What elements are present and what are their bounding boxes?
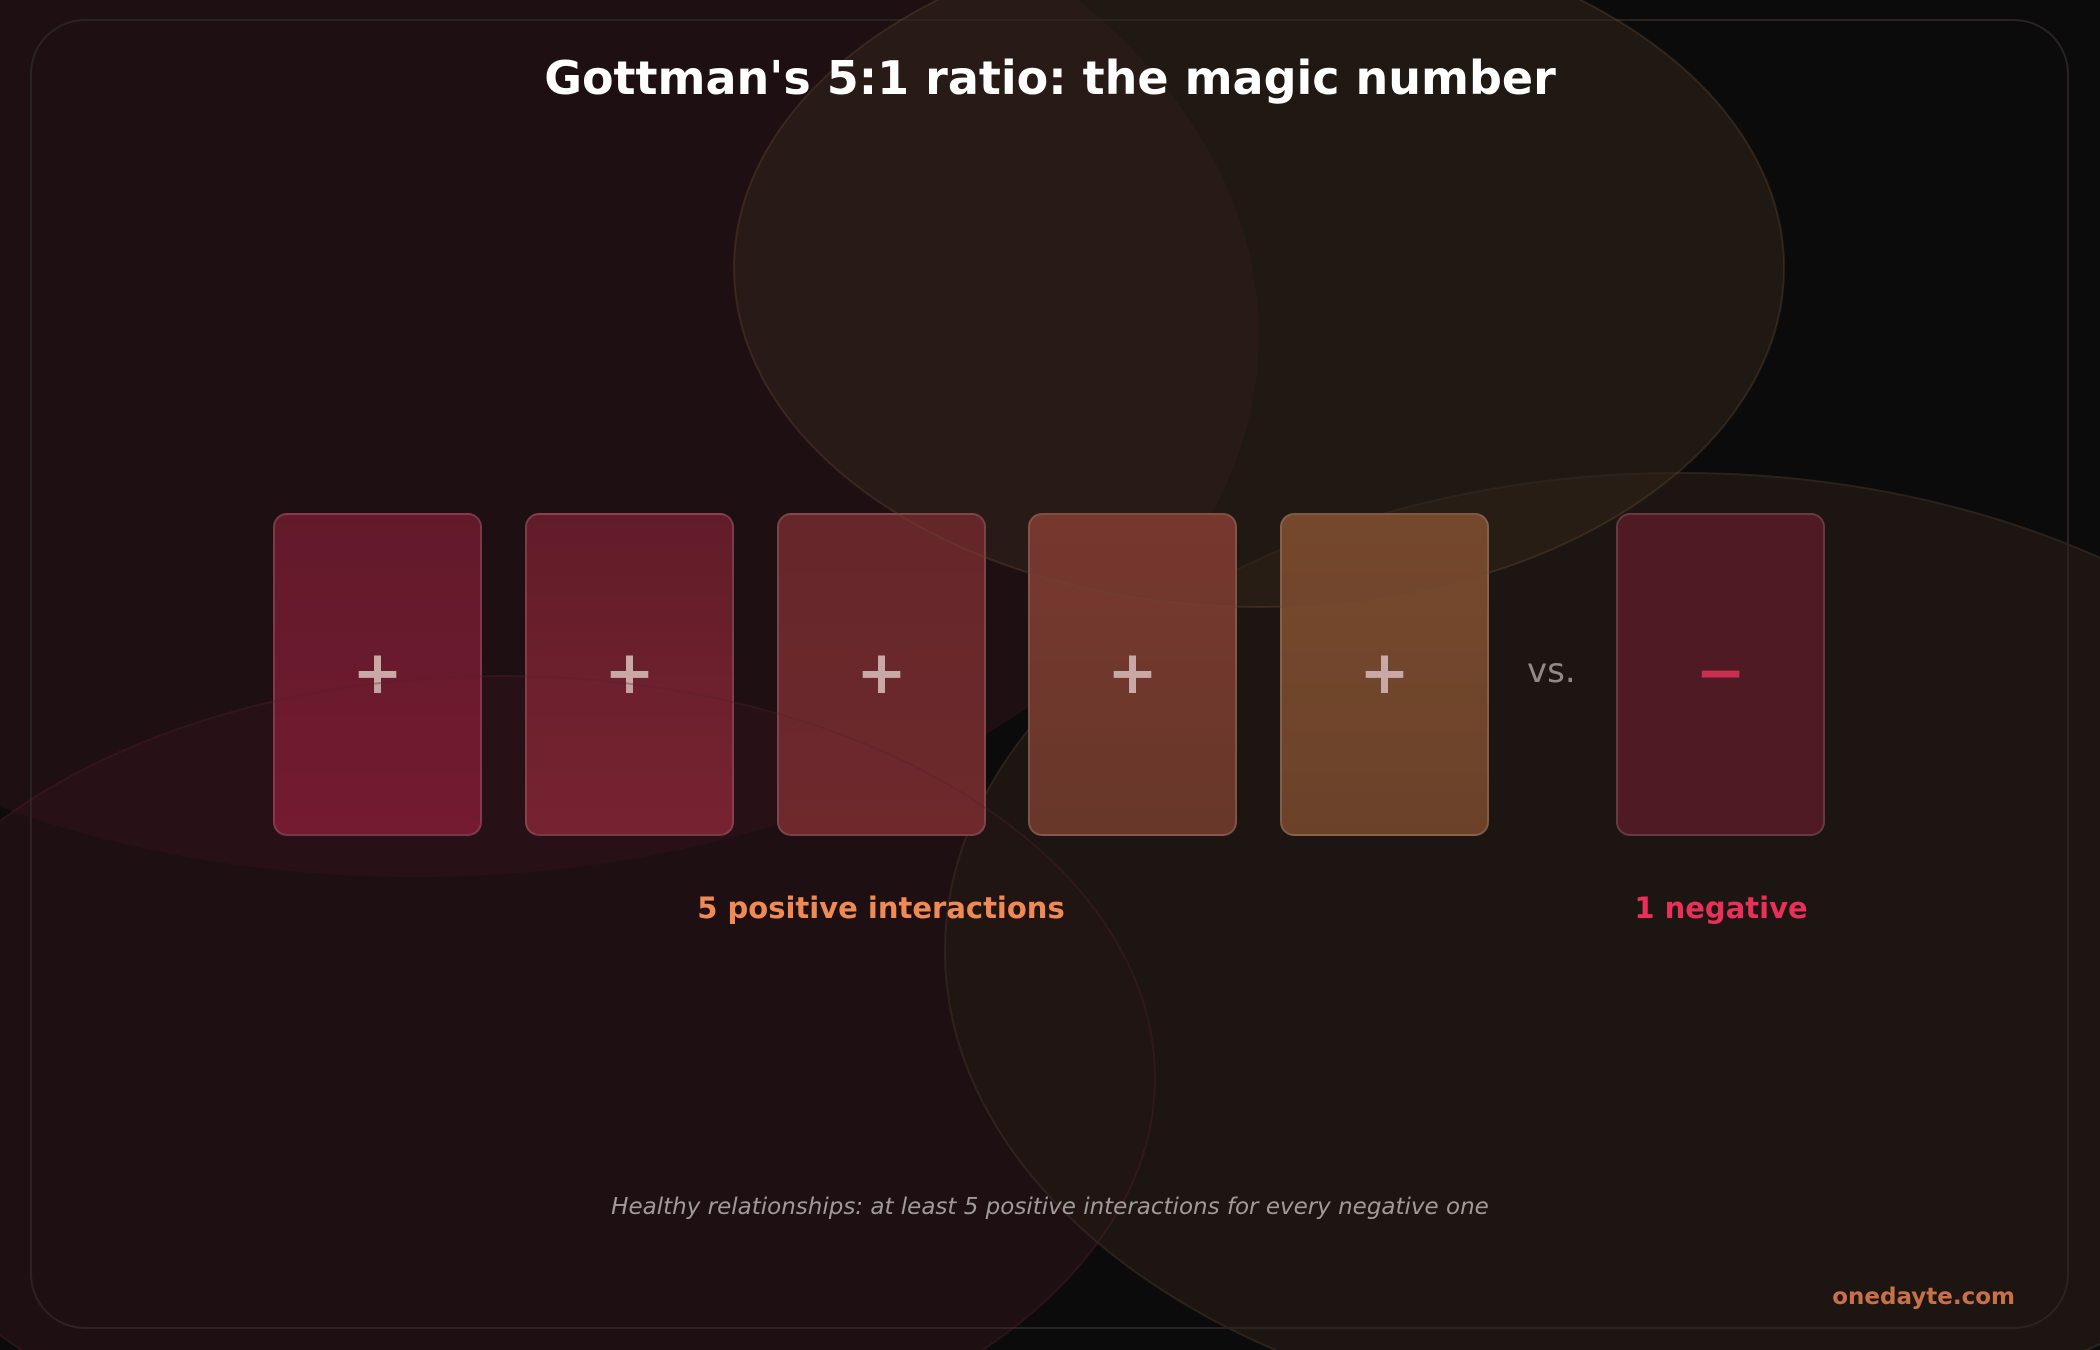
card: negative (1616, 513, 1825, 836)
brand: onedayte.com (1832, 1284, 2015, 1310)
card: positive 4: + (1107, 638, 1158, 708)
card: positive 3 (777, 513, 986, 836)
card: positive 4 (1028, 513, 1237, 836)
card: positive 1: + (352, 638, 403, 708)
card: positive 3: + (856, 638, 907, 708)
card: positive 2 (525, 513, 734, 836)
label: negative: 1 negative (1634, 891, 1808, 925)
card: positive 5 (1280, 513, 1489, 836)
label: positives: 5 positive interactions (697, 891, 1065, 925)
card: positive 2: + (604, 638, 655, 708)
vs text: vs. (1527, 651, 1576, 691)
card: positive 1 (273, 513, 482, 836)
footer caption: Healthy relationships: at least 5 positive interactions for every negative one (611, 1194, 1489, 1220)
title: Gottman's 5:1 ratio: the magic number (544, 51, 1556, 105)
card: negative: − (1695, 638, 1746, 708)
card: positive 5: + (1359, 638, 1410, 708)
card row (273, 513, 1825, 836)
